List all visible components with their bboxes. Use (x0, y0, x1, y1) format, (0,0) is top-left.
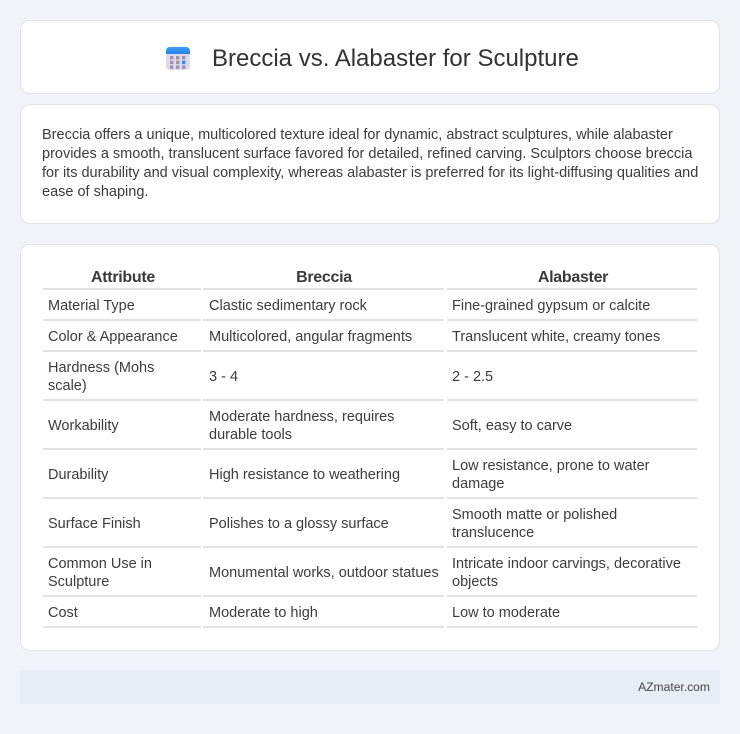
icon: calendar (166, 47, 190, 70)
comparison table panel: Common Use in (48, 556, 152, 572)
comparison table panel: Monumental works, outdoor statues (209, 565, 439, 581)
comparison table panel: scale) (48, 378, 87, 394)
comparison table panel: translucence (452, 525, 534, 541)
row: material type (43, 298, 697, 321)
comparison table panel (20, 244, 720, 651)
row: cost (43, 605, 697, 628)
comparison table panel: Durability (48, 467, 108, 483)
summary text: Breccia offers a unique, multicolored texture ideal for dynamic, abstract sculptures, while alabaster (42, 127, 673, 143)
comparison table panel: Breccia (296, 269, 352, 286)
comparison table panel: Workability (48, 418, 119, 434)
comparison table panel: Hardness (Mohs (48, 360, 154, 376)
comparison table panel: Clastic sedimentary rock (209, 298, 367, 314)
comparison table panel: 2 - 2.5 (452, 369, 493, 385)
comparison table panel: Fine-grained gypsum or calcite (452, 298, 650, 314)
comparison table panel: Moderate to high (209, 605, 318, 621)
row: hardness (43, 360, 697, 401)
comparison table panel: durable tools (209, 427, 292, 443)
comparison table panel: Moderate hardness, requires (209, 409, 394, 425)
comparison table panel: Translucent white, creamy tones (452, 329, 660, 345)
comparison table panel: Low resistance, prone to water (452, 458, 649, 474)
summary text (42, 127, 698, 200)
comparison table panel: Polishes to a glossy surface (209, 516, 389, 532)
row: durability (43, 458, 697, 499)
comparison table panel: damage (452, 476, 504, 492)
header panel (20, 20, 720, 94)
row: common use (43, 556, 697, 597)
comparison table panel: Alabaster (538, 269, 608, 286)
title: Breccia vs. Alabaster for Sculpture (212, 45, 579, 72)
row: workability (43, 409, 697, 450)
comparison table panel: Smooth matte or polished (452, 507, 617, 523)
summary text: provides a smooth, translucent surface favored for detailed, refined carving. Sculptors choose breccia (42, 146, 692, 162)
comparison table panel: Cost (48, 605, 78, 621)
row: color and appearance (43, 329, 697, 352)
comparison table panel: Color & Appearance (48, 329, 178, 345)
comparison table panel: Multicolored, angular fragments (209, 329, 412, 345)
comparison table panel: Soft, easy to carve (452, 418, 572, 434)
table header row (43, 269, 697, 290)
footer bar (20, 670, 720, 704)
summary panel (20, 104, 720, 224)
footer credit: AZmater.com (638, 680, 710, 694)
comparison table panel: Material Type (48, 298, 135, 314)
comparison table panel: Attribute (91, 269, 155, 286)
comparison table panel: objects (452, 574, 498, 590)
comparison table panel: Intricate indoor carvings, decorative (452, 556, 681, 572)
row: surface finish (43, 507, 697, 548)
comparison table panel: Low to moderate (452, 605, 560, 621)
comparison table panel: High resistance to weathering (209, 467, 400, 483)
comparison table panel: Sculpture (48, 574, 109, 590)
summary text: ease of shaping. (42, 184, 148, 200)
comparison table panel: 3 - 4 (209, 369, 238, 385)
summary text: for its durability and visual complexity, whereas alabaster is preferred for its light-diffusing qualities and (42, 165, 698, 181)
comparison table panel: Surface Finish (48, 516, 141, 532)
